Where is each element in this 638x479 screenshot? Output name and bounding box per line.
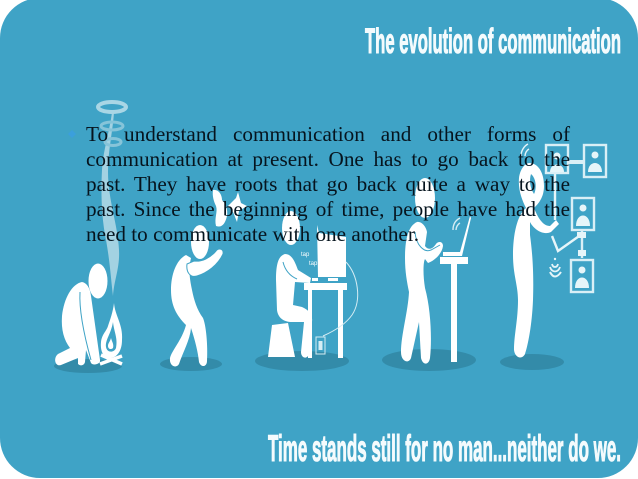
tap labels: tap <box>309 261 318 267</box>
fire <box>100 303 122 364</box>
wifi signals <box>521 144 561 276</box>
desk <box>304 283 347 358</box>
figure: person at desktop computer <box>268 211 358 358</box>
stool <box>268 323 295 357</box>
wifi <box>453 218 460 230</box>
laptop and stand <box>440 257 468 362</box>
cable and outlet <box>323 262 358 336</box>
body text: communication at present. One has to go back to the <box>86 147 570 171</box>
figure: person at laptop <box>401 178 471 364</box>
tap labels <box>301 252 318 267</box>
body text: need to communicate with one another. <box>86 222 419 246</box>
figure: person holding object <box>170 190 247 366</box>
monitor <box>317 225 346 277</box>
figure: modern person with connected devices <box>513 144 606 357</box>
bullet marker <box>68 130 76 138</box>
held object <box>213 190 227 227</box>
tap labels: tap <box>301 252 310 258</box>
tablet frame <box>552 173 582 251</box>
body text: To understand communication and other forms of <box>86 122 570 146</box>
figure: kneeling person with fire <box>55 264 122 365</box>
smoke rings and trail <box>98 102 126 296</box>
profile cards <box>546 145 606 292</box>
body text: past. Since the beginning of time, people have had the <box>86 197 570 221</box>
body text <box>86 122 570 246</box>
ground shadows <box>54 349 564 373</box>
body text: past. They have roots that go back quite a way to the <box>86 172 570 196</box>
